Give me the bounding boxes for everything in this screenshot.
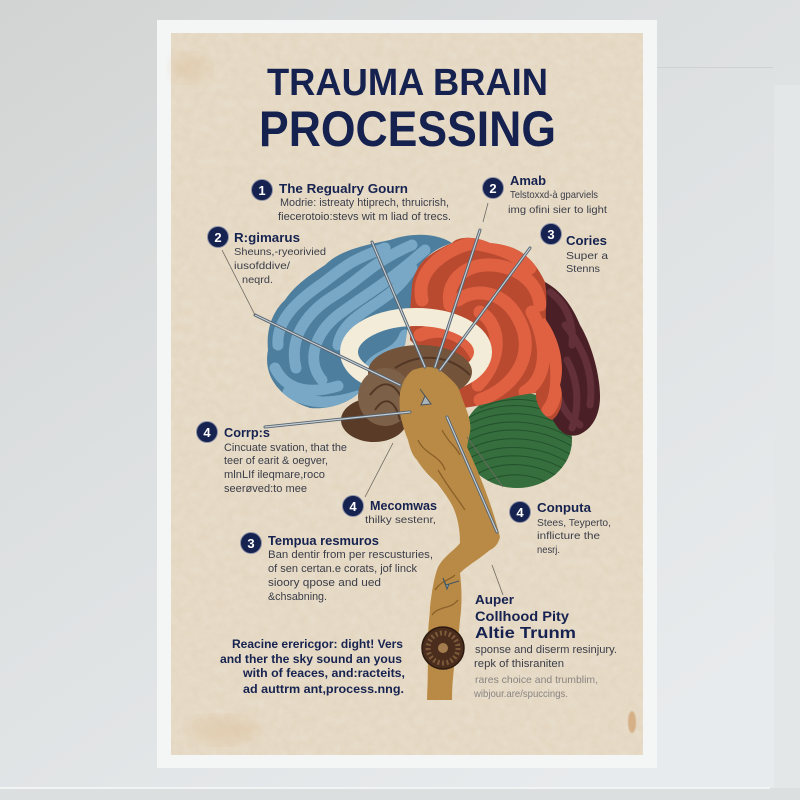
callout 4: Conputa: inflicture the: [537, 530, 600, 542]
callout 2: Rgimarus: Sheuns,-ryeorivied: [234, 246, 326, 258]
closing statement: with of feaces, and:racteits,: [242, 666, 405, 680]
callout 1: The Regualry Gourn: 1: [258, 183, 266, 198]
callout 4: Corrpis: [196, 422, 347, 495]
callout 4: Corrpis: Cincuate svation, that the: [224, 442, 347, 454]
icon: triangle marker: [420, 389, 431, 405]
callout 1: The Regualry Gourn: The Regualry Gourn: [279, 181, 408, 196]
icon: wheel disc: [422, 627, 464, 669]
poster frame: [157, 20, 657, 768]
callout: Auper Collhood Pity: rares choice and trumblim,: [475, 674, 598, 686]
callout 2: Amab: img ofini sier to light: [508, 204, 607, 216]
callout 3: Cories: [540, 224, 608, 275]
callout 2: Rgimarus: neqrd.: [242, 274, 273, 286]
callout 2: Amab: 2: [489, 181, 497, 196]
callout 4: Mecomwas: thilky sestenr,: [365, 514, 436, 526]
callout 4: Mecomwas: 4: [349, 499, 357, 514]
callout 4: Corrpis: 4: [203, 425, 211, 440]
brain illustration: [222, 203, 600, 700]
brainstem: [399, 367, 500, 700]
callout 4: Corrpis: teer of earit & oegver,: [224, 455, 328, 467]
closing statement: ad auttrm ant,process.nng.: [243, 682, 404, 696]
callout 4: Conputa: Stees, Teyperto,: [537, 517, 611, 529]
callout: Auper Collhood Pity: [473, 592, 617, 700]
title: [259, 62, 556, 157]
callout 3: Cories: Stenns: [566, 263, 600, 275]
closing statement: and ther the sky sound an yous: [220, 652, 402, 666]
callout 2: Rgimarus: R:gimarus: [234, 231, 300, 245]
callout 3: Cories: 3: [547, 227, 555, 242]
callout 4: Corrpis: mlnLIf ileqmare,roco: [224, 469, 325, 481]
callout: Auper Collhood Pity: Altie Trunm: [475, 625, 576, 642]
parietal lobe: [267, 235, 452, 408]
limbic structures: [341, 345, 472, 442]
callout 3: Cories: Super a: [566, 250, 608, 262]
callout 4: Conputa: Conputa: [537, 501, 592, 515]
callout 2: Rgimarus: 2: [214, 230, 222, 245]
callout 4: Mecomwas: Mecomwas: [370, 499, 437, 513]
callout 2: Amab: Amab: [510, 174, 546, 188]
title: TRAUMA BRAIN: [267, 62, 548, 104]
callout 3: Tempua resmuros: [240, 532, 433, 603]
callout 1: The Regualry Gourn: fiecerotoio:stevs wit m liad of trecs.: [278, 211, 451, 223]
callout 3: Tempua resmuros: sioory qpose and ued: [268, 577, 381, 589]
callout: Auper Collhood Pity: Auper: [475, 592, 514, 607]
callout 2: Amab: [482, 174, 607, 216]
callout 4: Conputa: nesrj.: [537, 544, 560, 556]
callout: Auper Collhood Pity: Collhood Pity: [475, 609, 570, 624]
callout 4: Conputa: [510, 501, 611, 556]
callout 3: Tempua resmuros: of sen certan.e corats, jof linck: [268, 563, 417, 575]
callout 3: Tempua resmuros: 3: [247, 536, 255, 551]
callout 3: Cories: Cories: [566, 233, 607, 248]
leader lines: [222, 203, 503, 595]
callout 4: Conputa: 4: [516, 505, 524, 520]
callout 3: Tempua resmuros: &chsabning.: [268, 591, 327, 603]
occipital lobe: [545, 282, 600, 436]
callout 3: Tempua resmuros: Ban dentir from per rescusturies,: [268, 549, 433, 561]
callout 1: The Regualry Gourn: Modrie: istreaty htiprech, thruicrish,: [280, 197, 449, 209]
icon: bird marker: [443, 578, 459, 589]
callout 4: Corrpis: Corrp:s: [224, 426, 270, 440]
closing statement: Reacine erericgor: dight! Vers: [232, 637, 403, 651]
callout 4: Mecomwas: [342, 496, 437, 526]
frontal lobe: [410, 238, 562, 420]
callout: Auper Collhood Pity: repk of thisraniten: [474, 658, 564, 670]
callout 2: Rgimarus: [208, 226, 326, 286]
callout 3: Tempua resmuros: Tempua resmuros: [268, 534, 379, 548]
callout: Auper Collhood Pity: sponse and diserm resinjury.: [475, 644, 617, 656]
callout: Auper Collhood Pity: wibjour.are/spuccings.: [473, 688, 568, 700]
callout 2: Rgimarus: iusofddive/: [234, 260, 290, 272]
title: PROCESSING: [259, 101, 556, 157]
needles: [255, 230, 530, 532]
closing statement: [220, 637, 405, 696]
poster paper: [170, 33, 643, 755]
callout 1: The Regualry Gourn: [252, 180, 451, 223]
callout 2: Amab: Telstoxxd-à gparviels: [510, 189, 598, 201]
cerebellum: [467, 394, 572, 488]
white ring: [349, 317, 483, 387]
callout 4: Corrpis: seerøved:to mee: [224, 483, 307, 495]
